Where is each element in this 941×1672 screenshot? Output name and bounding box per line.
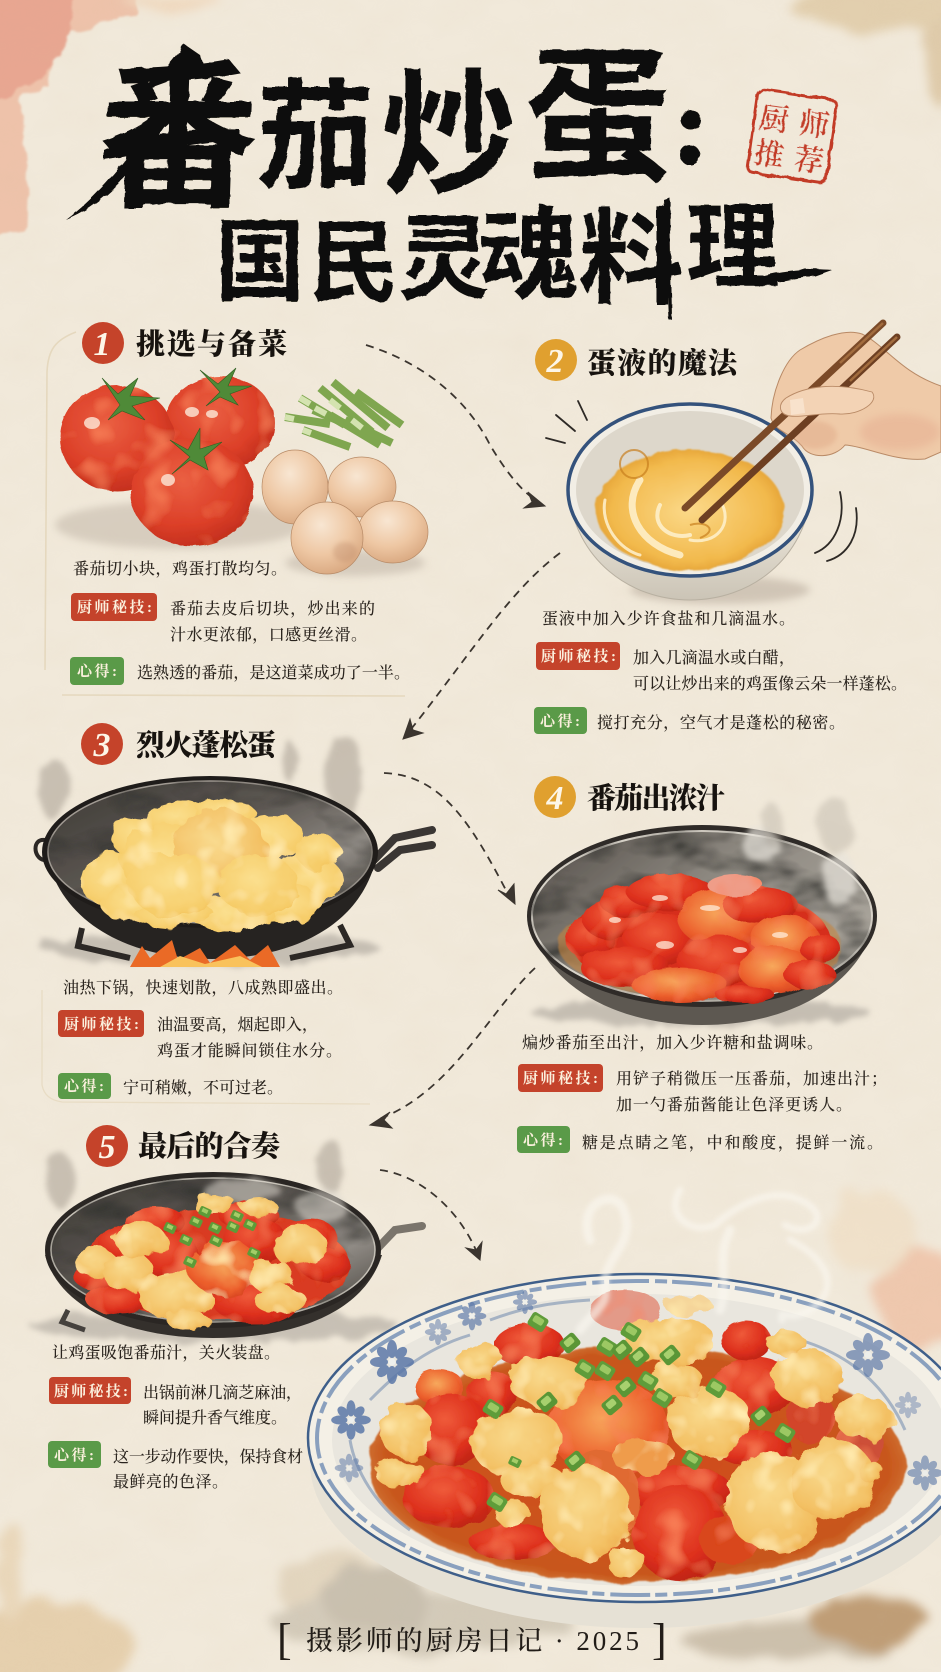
chef tip 4 [518, 1064, 887, 1114]
heading 1: 挑选与备菜 [136, 327, 287, 361]
insight 3 [58, 1073, 283, 1099]
panel: step 5 final combination [30, 1125, 422, 1491]
arrow: step 3 to step 4 [384, 773, 515, 904]
insight 4: 心得: [523, 1132, 563, 1149]
chef tip 2: 可以让炒出来的鸡蛋像云朵一样蓬松。 [633, 674, 907, 693]
seal stamp: chef recommended: 厨 [757, 101, 791, 138]
tomato chunks [403, 1290, 884, 1581]
badge 3 [81, 723, 123, 765]
seal stamp: chef recommended: 师 [797, 107, 831, 144]
scallions [163, 1205, 261, 1269]
chef tip 4: 用铲子稍微压一压番茄，加速出汁； [616, 1069, 887, 1088]
heading 4: 番茄出浓汁 [587, 782, 725, 815]
chef tip 5: 瞬间提升香气维度。 [143, 1408, 287, 1427]
insight 2 [534, 707, 845, 734]
heading 3: 烈火蓬松蛋 [136, 729, 277, 762]
badge 1: 1 [94, 326, 110, 363]
chef tip 3 [58, 1010, 342, 1060]
insight 4: 糖是点睛之笔，中和酸度，提鲜一流。 [582, 1133, 883, 1152]
badge 2 [535, 339, 577, 381]
panel outline [45, 332, 405, 696]
title line 1: 炒 [381, 60, 517, 212]
chef tip 5 [49, 1377, 302, 1427]
badge 3: 3 [92, 727, 110, 764]
badge 5: 5 [98, 1129, 116, 1166]
title line 1: 番 [95, 49, 261, 228]
insight 5 [48, 1441, 303, 1491]
insight 1: 选熟透的番茄，是这道菜成功了一半。 [137, 663, 410, 682]
heading 5: 最后的合奏 [138, 1130, 283, 1163]
illustration: wok with tomatoes [527, 797, 877, 1026]
insight 1 [70, 657, 410, 685]
title line 2: 料 [579, 202, 683, 318]
illustration: finished dish on blue and white plate [308, 1190, 941, 1628]
stewed tomatoes [564, 874, 840, 1003]
hand [771, 332, 941, 459]
footer signature: ] [652, 1615, 667, 1664]
badge 4 [534, 776, 576, 818]
arrow: step 5 to finished plate [380, 1170, 482, 1260]
plate [308, 1274, 941, 1628]
title line 2: 灵 [398, 209, 490, 311]
footer signature [277, 1615, 667, 1664]
chef tip 5: 出锅前淋几滴芝麻油， [143, 1384, 302, 1402]
description 1: 番茄切小块，鸡蛋打散均匀。 [73, 559, 287, 578]
scallion garnish [481, 1311, 797, 1513]
title line 2: 理 [686, 195, 780, 300]
chef tip 5: 厨师秘技: [54, 1382, 128, 1400]
insight 2: 搅打充分，空气才是蓬松的秘密。 [597, 713, 845, 732]
footer signature: [ [277, 1615, 292, 1664]
footer signature: 摄影师的厨房日记 · 2025 [306, 1626, 639, 1656]
panel: step 3 fluffy eggs over high heat [36, 723, 432, 1104]
seal stamp: chef recommended: 推 [752, 137, 786, 174]
chef tip 1: 厨师秘技: [77, 598, 152, 616]
illustration: wok with eggs and tomatoes [30, 1139, 422, 1342]
seal stamp: chef recommended [747, 89, 837, 183]
title line 1: 茄 [257, 72, 375, 204]
panel: step 2 egg magic [534, 323, 941, 734]
badge 2: 2 [546, 343, 564, 380]
insight 3: 心得: [64, 1078, 104, 1095]
badge 4: 4 [546, 780, 564, 817]
panel outline [42, 990, 370, 1104]
description 2: 蛋液中加入少许食盐和几滴温水。 [542, 609, 795, 628]
title line 2 [215, 195, 832, 320]
egg curds [374, 1294, 892, 1578]
chef tip 2 [536, 642, 907, 693]
badge 5 [86, 1125, 128, 1167]
arrow: step 1 to step 2 [366, 345, 545, 508]
description 3: 油热下锅，快速划散，八成熟即盛出。 [63, 978, 343, 997]
chef tip 1: 番茄去皮后切块，炒出来的 [170, 599, 375, 618]
chef tip 4: 厨师秘技: [523, 1069, 598, 1087]
insight 5: 心得: [54, 1447, 94, 1464]
steam [580, 1190, 827, 1330]
title: two-line calligraphy heading [66, 36, 832, 320]
seal stamp: chef recommended: 荐 [792, 143, 826, 179]
illustration: wok with eggs on burner [36, 735, 432, 967]
title line 1: ： [685, 159, 686, 161]
chef tip 1: 汁水更浓郁，口感更丝滑。 [170, 626, 367, 644]
arrow: step 4 to step 5 [370, 968, 535, 1128]
panel: step 1 choose and prepare [45, 322, 428, 696]
panel: step 4 tomato sauce [517, 776, 887, 1153]
description 4: 煸炒番茄至出汁，加入少许糖和盐调味。 [522, 1033, 823, 1052]
arrow: step 2 to step 3 [403, 553, 560, 739]
chef tip 3: 厨师秘技: [64, 1015, 139, 1033]
insight 3: 宁可稍嫩，不可过老。 [123, 1078, 283, 1097]
chopsticks [685, 323, 883, 508]
illustration: tomatoes, scallions, eggs [55, 368, 428, 576]
chef tip 1 [71, 593, 375, 644]
thumb [780, 386, 874, 416]
title line 2: 国 [215, 213, 305, 313]
title line 1 [66, 36, 701, 228]
insight 1: 心得: [77, 663, 117, 680]
chef tip 3: 鸡蛋才能瞬间锁住水分。 [157, 1041, 342, 1060]
chef tip 4: 加一勺番茄酱能让色泽更诱人。 [616, 1095, 852, 1114]
chef tip 2: 加入几滴温水或白醋， [633, 649, 795, 667]
chef tip 3: 油温要高，烟起即入， [157, 1016, 318, 1034]
scrambled eggs [80, 799, 342, 931]
insight 2: 心得: [540, 713, 580, 730]
description 5: 让鸡蛋吸饱番茄汁，关火装盘。 [52, 1343, 280, 1362]
mixed eggs and tomatoes [74, 1201, 351, 1324]
title line 2: 民 [309, 214, 399, 314]
motion lines [546, 401, 857, 561]
insight 4 [517, 1126, 883, 1153]
insight 5: 这一步动作要快，保持食材 [113, 1448, 303, 1466]
title line 2: 魂 [479, 200, 579, 312]
illustration: bowl, whisking hand, chopsticks [546, 323, 941, 604]
title line 1: 蛋 [525, 36, 671, 199]
heading 2: 蛋液的魔法 [587, 346, 740, 380]
badge 1 [82, 322, 124, 364]
chef tip 2: 厨师秘技: [541, 647, 616, 665]
insight 5: 最鲜亮的色泽。 [113, 1473, 228, 1491]
